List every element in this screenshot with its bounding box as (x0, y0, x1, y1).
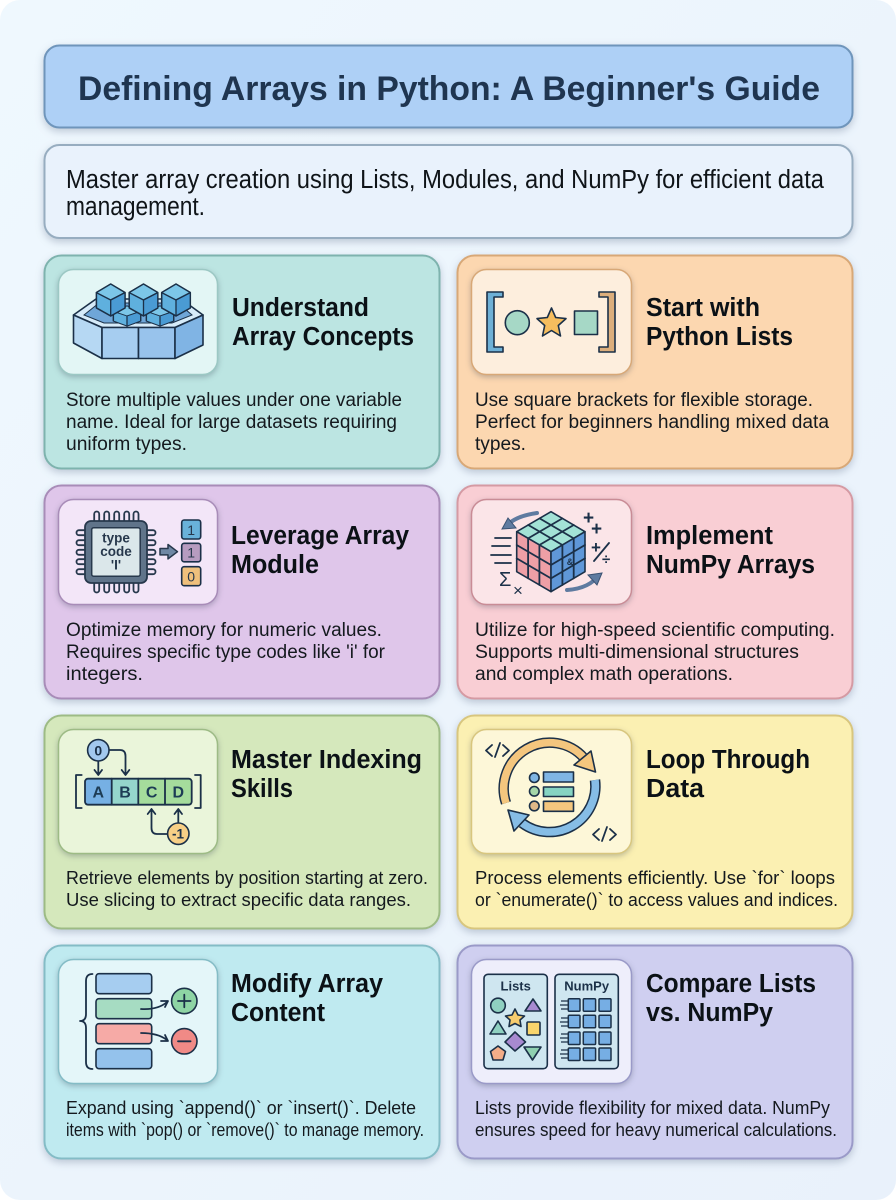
body text: Expand using `append()` or `insert()`. Delete (66, 1097, 416, 1118)
heading: Content (231, 999, 325, 1027)
panel: modify array content (44, 946, 440, 1158)
body text (66, 1097, 424, 1140)
heading (646, 522, 815, 579)
body text: Optimize memory for numeric values. (66, 620, 382, 641)
icon: numpy cube: ÷ (602, 551, 610, 568)
heading (232, 294, 414, 351)
icon: array indexing: 0 (94, 742, 102, 758)
heading (646, 970, 816, 1027)
icon: cubes in an array tray (58, 270, 218, 374)
heading: Skills (231, 775, 293, 803)
icon: loop arrows (472, 730, 632, 854)
heading: Array Concepts (232, 323, 414, 351)
heading: Loop Through (646, 746, 810, 774)
body text: types. (475, 434, 526, 455)
heading: Data (646, 775, 705, 803)
panel: leverage array module (44, 486, 440, 698)
body text: Perfect for beginners handling mixed data (475, 412, 829, 433)
heading: Master Indexing (231, 746, 422, 774)
body text (475, 620, 835, 685)
body text: Store multiple values under one variable (66, 390, 402, 411)
icon: numpy cube: & (567, 557, 574, 567)
subtitle text: Master array creation using Lists, Modules, and NumPy for efficient data (66, 166, 825, 194)
icon: type code chip (58, 500, 218, 604)
panel: start with python lists (458, 256, 852, 468)
icon: type code chip: 'I' (111, 558, 121, 572)
icon: numpy cube (472, 500, 632, 604)
subtitle panel (44, 145, 852, 238)
icon: lists and numpy comparison: Lists (501, 978, 531, 994)
body text: Process elements efficiently. Use `for` loops (475, 867, 835, 888)
body text (475, 867, 838, 910)
icon: numpy cube: × (513, 581, 523, 600)
heading (231, 522, 410, 579)
body text (475, 390, 829, 455)
body text: name. Ideal for large datasets requiring (66, 412, 397, 433)
heading (646, 294, 793, 351)
icon: numpy cube: Σ (499, 569, 511, 591)
heading: Understand (232, 294, 369, 322)
panel: master indexing skills (44, 716, 440, 928)
subtitle text (66, 166, 825, 221)
heading: Python Lists (646, 323, 793, 351)
icon: array indexing: A (93, 784, 105, 802)
body text: Requires specific type codes like 'i' for (66, 642, 386, 663)
heading (646, 746, 810, 803)
icon: array indexing: B (119, 784, 131, 802)
body text: Use slicing to extract specific data ranges. (66, 889, 411, 910)
body text: ensures speed for heavy numerical calculations. (475, 1119, 837, 1140)
body text: integers. (66, 664, 143, 685)
body text (475, 1097, 837, 1140)
icon: numpy cube: + (583, 508, 594, 529)
body text: or `enumerate()` to access values and indices. (475, 889, 838, 910)
icon: lists and numpy comparison: NumPy (564, 978, 610, 994)
icon: lists and numpy comparison (472, 960, 632, 1084)
icon: add and remove items (58, 960, 218, 1084)
body text: Retrieve elements by position starting at zero. (66, 867, 428, 888)
icon: type code chip: type (102, 530, 130, 546)
icon: numpy cube: + (591, 538, 601, 557)
panel: loop through data (458, 716, 852, 928)
body text: and complex math operations. (475, 664, 733, 685)
heading (231, 746, 422, 803)
heading: Module (231, 551, 319, 579)
panel: understand array concepts (44, 256, 440, 468)
icon: type code chip: 0 (187, 568, 195, 584)
heading: Modify Array (231, 970, 384, 998)
title: Defining Arrays in Python: A Beginner's Guide (78, 70, 820, 108)
heading: Leverage Array (231, 522, 410, 550)
title banner (44, 46, 852, 128)
panel: compare lists vs numpy (458, 946, 852, 1158)
body text: Lists provide flexibility for mixed data. NumPy (475, 1097, 831, 1118)
body text (66, 867, 428, 910)
body text (66, 390, 402, 455)
heading: Start with (646, 294, 760, 322)
icon: array indexing: C (146, 784, 158, 802)
heading: Compare Lists (646, 970, 816, 998)
icon: type code chip: code (100, 544, 132, 559)
subtitle text: management. (66, 193, 205, 221)
body text: Supports multi-dimensional structures (475, 642, 799, 663)
heading: Implement (646, 522, 773, 550)
body text: Utilize for high-speed scientific computing. (475, 620, 835, 641)
icon: array indexing: -1 (172, 827, 184, 842)
heading: NumPy Arrays (646, 551, 815, 579)
body text: uniform types. (66, 434, 187, 455)
heading (231, 970, 384, 1027)
body text (66, 620, 386, 685)
icon: list in square brackets (472, 270, 632, 374)
body text: items with `pop() or `remove()` to manage memory. (66, 1119, 424, 1140)
body text: Use square brackets for flexible storage. (475, 390, 813, 411)
icon: type code chip: 1 (187, 522, 195, 538)
icon: array indexing (58, 730, 218, 854)
panel: implement numpy arrays (458, 486, 852, 698)
icon: numpy cube: + (591, 519, 602, 540)
icon: type code chip: 1 (187, 544, 195, 560)
icon: array indexing: D (173, 784, 184, 802)
heading: vs. NumPy (646, 999, 774, 1027)
